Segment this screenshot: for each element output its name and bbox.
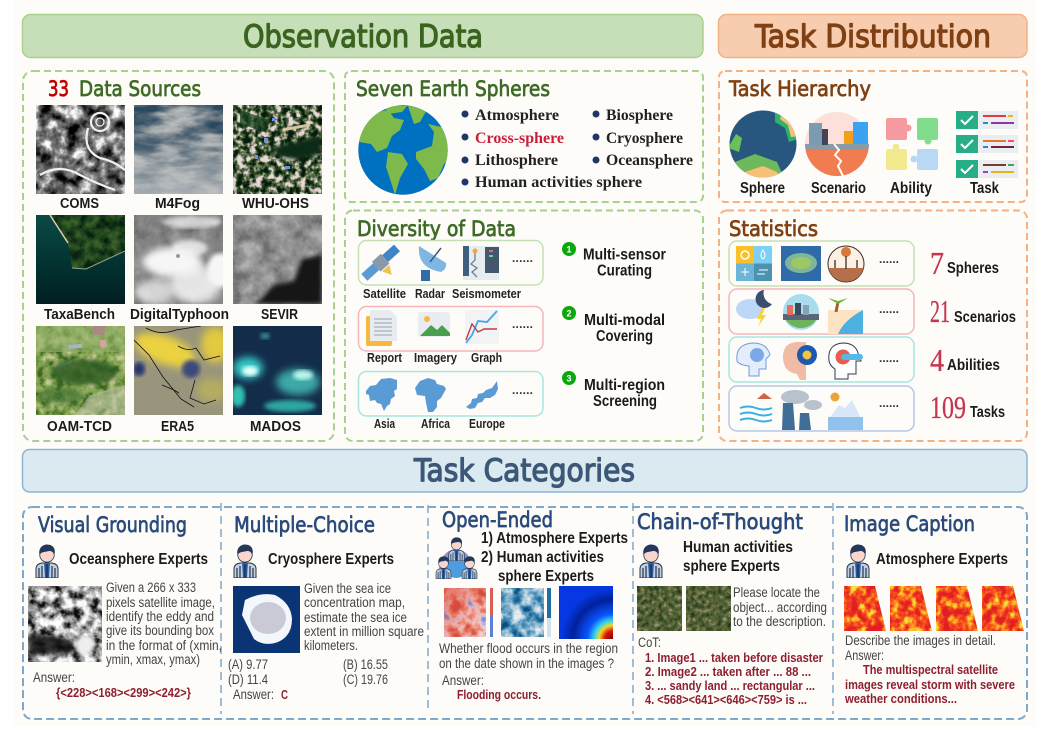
label: human activities experts: Human activities — [683, 539, 793, 556]
answer — [844, 662, 1015, 706]
step 3: multi-region screening: Screening — [593, 393, 657, 410]
panel: diversity of data — [345, 210, 703, 441]
heading: Seven Earth Spheres: Seven Earth Spheres — [356, 77, 550, 101]
answer: The multispectral satellite — [863, 662, 998, 677]
image: eddy — [28, 586, 102, 662]
box: regions: ...... — [512, 383, 533, 397]
icon: city — [783, 294, 819, 330]
prompt text — [439, 641, 618, 671]
icon: sphere — [730, 110, 796, 178]
icon: Europe map — [466, 381, 498, 409]
prompt text: pixels satellite image, — [106, 595, 215, 610]
column: Multiple-Choice — [228, 513, 424, 702]
prompt text: estimate the sea ice — [304, 610, 407, 625]
icon: weather quadrants — [736, 246, 772, 281]
answer: images reveal storm with severe — [845, 677, 1015, 692]
icon: smokestacks — [781, 390, 822, 430]
icon: expert — [36, 545, 58, 578]
icon: expert — [640, 545, 662, 578]
image: before disaster — [637, 586, 682, 631]
list: sphere names: Lithosphere — [475, 152, 558, 169]
icon: beach — [828, 298, 863, 334]
icon: imagery — [418, 312, 450, 337]
column: Visual Grounding — [28, 513, 222, 700]
label: human activities experts: sphere Experts — [683, 558, 780, 575]
prompt text: Given the sea ice — [304, 581, 391, 596]
image: after disaster — [686, 586, 731, 631]
label: ERA5: ERA5 — [161, 419, 194, 435]
label: expert spheres: 1) Atmosphere Experts — [481, 530, 628, 547]
answer: weather conditions... — [844, 691, 957, 706]
list: sphere names — [462, 107, 693, 191]
row: scenarios: ...... — [879, 302, 899, 316]
list: sphere names: Cryosphere — [606, 130, 683, 147]
column: Open-Ended — [436, 508, 628, 702]
statistic: 4 abilities: Abilities — [947, 357, 1000, 374]
step 3: multi-region screening: Multi-region — [584, 377, 665, 394]
icon: head with gear — [737, 343, 770, 376]
heading: 33 Data Sources: 33 — [48, 77, 69, 101]
label: TaxaBench: TaxaBench — [44, 307, 115, 323]
labels: sensor types: Radar — [415, 287, 445, 301]
statistic: 21 scenarios — [930, 293, 1016, 329]
heading banner: Observation Data — [22, 14, 703, 58]
satellite image: DigitalTyphoon — [134, 215, 223, 304]
satellite image: COMS — [36, 105, 125, 194]
chain of thought steps: 1. Image1 ... taken before disaster — [645, 650, 823, 665]
column: Chain-of-Thought — [637, 510, 827, 707]
row: tasks: ...... — [879, 396, 899, 410]
labels: sensor types: Seismometer — [452, 287, 521, 301]
label: expert spheres: 2) Human activities — [481, 549, 604, 566]
satellite image: MADOS — [231, 326, 322, 415]
list: sphere names: Cross-sphere — [475, 130, 564, 147]
labels: hierarchy levels: Task — [970, 180, 999, 197]
heading: Visual Grounding: Visual Grounding — [38, 513, 187, 537]
statistic: 109 tasks: Tasks — [970, 404, 1005, 421]
prompt text: Describe the images in detail. — [845, 633, 996, 648]
labels: modality types: Graph — [471, 351, 502, 365]
labels: modality types: Imagery — [414, 351, 457, 365]
images: multispectral storm — [844, 586, 1024, 631]
heading: Image Caption: Image Caption — [844, 512, 975, 536]
heading banner: Task Categories: Task Categories — [413, 453, 635, 489]
prompt text: object... according — [733, 600, 827, 615]
satellite image: M4Fog — [134, 105, 223, 194]
list: sphere names: Oceansphere — [606, 152, 693, 169]
prompt text: Whether flood occurs in the region — [439, 641, 618, 656]
label: WHU-OHS: WHU-OHS — [242, 196, 309, 212]
image: precipitation map — [559, 586, 613, 639]
satellite image: WHU-OHS — [233, 105, 322, 194]
step 2: multi-modal covering: Multi-modal — [584, 312, 665, 329]
row: spheres: ...... — [879, 252, 899, 266]
icon: storm cloud — [736, 290, 772, 327]
prompt text: extent in million square — [304, 624, 424, 639]
box: modalities — [358, 306, 543, 351]
aerial image: OAM-TCD — [36, 326, 125, 415]
step 2: multi-modal covering: Covering — [596, 328, 653, 345]
answer: Answer: — [442, 673, 484, 688]
chain of thought steps — [638, 635, 823, 707]
heading: Diversity of Data: Diversity of Data — [357, 217, 516, 241]
prompt text: ymin, xmax, ymax) — [106, 652, 200, 667]
label: expert spheres — [481, 530, 628, 585]
answer: C — [281, 687, 288, 702]
column: Image Caption — [844, 512, 1024, 706]
labels: modality types: Report — [367, 351, 403, 365]
heading: Chain-of-Thought: Chain-of-Thought — [637, 510, 803, 534]
icon: head with gear and toggle — [829, 343, 863, 379]
labels: region names — [374, 417, 505, 431]
row: abilities: ...... — [879, 351, 899, 365]
label: SEVIR: SEVIR — [261, 307, 298, 323]
statistic: 7 spheres: 7 — [930, 245, 944, 281]
statistic: 7 spheres: Spheres — [947, 260, 999, 277]
step 2: multi-modal covering — [562, 306, 665, 345]
image: temperature map — [444, 588, 493, 637]
heading: Task Hierarchy: Task Hierarchy — [728, 77, 871, 101]
step 2: multi-modal covering: 2 — [566, 308, 572, 318]
heading: Multiple-Choice: Multiple-Choice — [234, 513, 375, 537]
heading banner: Task Distribution — [718, 14, 1027, 58]
labels: sensor types — [363, 287, 521, 301]
label: MADOS: MADOS — [250, 419, 301, 435]
row: spheres — [729, 241, 914, 286]
list: sphere names: Human activities sphere — [475, 174, 642, 191]
icon: task checklist — [956, 111, 1018, 178]
icon: island — [781, 246, 821, 281]
prompt text: in the format of (xmin, — [106, 638, 222, 653]
label: human activities experts — [683, 539, 793, 575]
panel: statistics — [719, 210, 1027, 441]
statistic: 109 tasks: 109 — [930, 389, 966, 425]
answer: Flooding occurs. — [457, 687, 541, 702]
step 3: multi-region screening — [562, 371, 665, 410]
answer — [442, 673, 541, 702]
box: modalities: ...... — [512, 317, 533, 331]
prompt text: on the date shown in the images ? — [439, 656, 614, 671]
row: abilities — [729, 337, 914, 382]
icon: expert group — [436, 537, 477, 579]
labels: region names: Europe — [469, 417, 505, 431]
step 1: multi-sensor curating: Curating — [597, 262, 652, 280]
label: DigitalTyphoon: DigitalTyphoon — [130, 307, 229, 323]
prompt text — [733, 585, 827, 629]
statistic: 21 scenarios: Scenarios — [954, 309, 1016, 326]
chain of thought steps: 2. Image2 ... taken after ... 88 ... — [645, 664, 811, 679]
answer options: (A) 9.77 — [228, 657, 268, 672]
icon: report — [366, 310, 397, 346]
list: sphere names: Atmosphere — [475, 107, 559, 124]
labels: region names: Africa — [421, 417, 451, 431]
chain of thought steps: CoT: — [638, 635, 661, 650]
heading banner: Task Distribution: Task Distribution — [754, 19, 991, 55]
chain of thought steps: 3. ... sandy land ... rectangular ... — [645, 678, 815, 693]
labels: hierarchy levels: Sphere — [740, 180, 785, 197]
labels: hierarchy levels — [740, 180, 999, 197]
icon: head with eye — [783, 342, 817, 380]
prompt text: Given a 266 x 333 — [106, 580, 196, 595]
label: Atmosphere Experts: Atmosphere Experts — [876, 551, 1008, 568]
icon: soil — [828, 246, 864, 282]
icon: graph — [465, 310, 499, 344]
row: tasks — [729, 386, 914, 431]
panel: task category examples — [23, 503, 1027, 719]
answer: Answer: — [33, 670, 75, 685]
heading: Statistics: Statistics — [729, 217, 818, 241]
icon: seismometer — [463, 246, 499, 280]
icon: radar dish — [419, 246, 446, 281]
statistic: 7 spheres — [930, 245, 999, 281]
icon: globe — [358, 105, 452, 195]
label: OAM-TCD: OAM-TCD — [47, 419, 112, 435]
statistic: 4 abilities: 4 — [930, 342, 944, 378]
label: Oceansphere Experts: Oceansphere Experts — [69, 551, 208, 568]
heading: 33 Data Sources: Data Sources — [79, 77, 201, 101]
satellite image: SEVIR — [233, 215, 322, 304]
chain of thought steps: 4. <568><641><646><759> is ... — [645, 692, 807, 707]
heading banner: Observation Data: Observation Data — [243, 19, 483, 55]
prompt text — [106, 580, 222, 667]
icon: Africa map — [415, 378, 446, 412]
prompt text: give its bounding box — [106, 623, 214, 638]
prompt text: concentration map, — [304, 595, 405, 610]
label: Cryosphere Experts: Cryosphere Experts — [268, 551, 394, 568]
answer: Answer: — [233, 687, 274, 702]
icon: iceberg — [828, 392, 863, 430]
icon: puzzle pieces — [886, 118, 938, 170]
panel: seven earth spheres — [345, 71, 703, 202]
prompt text — [845, 633, 996, 663]
image: moisture map — [501, 588, 551, 637]
prompt text: Answer: — [845, 648, 884, 663]
answer options — [228, 657, 388, 687]
prompt text: identify the eddy and — [106, 609, 214, 624]
panel: 33 data sources — [23, 71, 334, 441]
labels: hierarchy levels: Ability — [890, 180, 932, 197]
step 3: multi-region screening: 3 — [566, 374, 572, 384]
prompt text: kilometers. — [304, 638, 358, 653]
answer options: (C) 19.76 — [343, 672, 388, 687]
icon: satellite — [360, 243, 408, 290]
icon: scenario earthquake — [805, 112, 869, 178]
statistic: 109 tasks — [930, 389, 1005, 425]
icon: expert — [234, 545, 256, 578]
climate map: ERA5 — [134, 326, 223, 415]
labels: modality types — [367, 351, 502, 365]
answer: {<228><168><299><242>} — [56, 685, 191, 700]
statistic: 4 abilities — [930, 342, 1000, 378]
icon: expert — [847, 545, 869, 578]
answer options: (D) 11.4 — [228, 672, 268, 687]
prompt text — [304, 581, 424, 653]
satellite image: TaxaBench — [36, 215, 125, 304]
label: M4Fog: M4Fog — [155, 196, 200, 212]
list: sphere names: Biosphere — [606, 107, 673, 124]
statistic: 21 scenarios: 21 — [930, 293, 950, 329]
label: COMS: COMS — [60, 196, 99, 212]
step 1: multi-sensor curating: Multi-sensor — [583, 246, 666, 264]
row: scenarios — [729, 289, 914, 334]
box: sensors — [358, 240, 543, 290]
step 1: multi-sensor curating: 1 — [566, 244, 572, 254]
prompt text: Please locate the — [733, 585, 820, 600]
labels: hierarchy levels: Scenario — [811, 180, 866, 197]
box: sensors: ...... — [512, 251, 533, 265]
labels: sensor types: Satellite — [363, 287, 406, 301]
icon: flood — [740, 393, 772, 422]
image: sea ice map — [233, 586, 300, 653]
prompt text: to the description. — [733, 614, 826, 629]
panel: task hierarchy — [719, 71, 1027, 202]
label: expert spheres: sphere Experts — [498, 568, 594, 585]
answer options: (B) 16.55 — [343, 657, 388, 672]
answer — [33, 670, 191, 700]
heading: Open-Ended: Open-Ended — [442, 508, 553, 532]
labels: region names: Asia — [374, 417, 396, 431]
heading banner: Task Categories — [22, 450, 1027, 492]
box: regions — [358, 372, 543, 416]
step 1: multi-sensor curating — [562, 242, 666, 280]
icon: Asia map — [366, 378, 397, 411]
